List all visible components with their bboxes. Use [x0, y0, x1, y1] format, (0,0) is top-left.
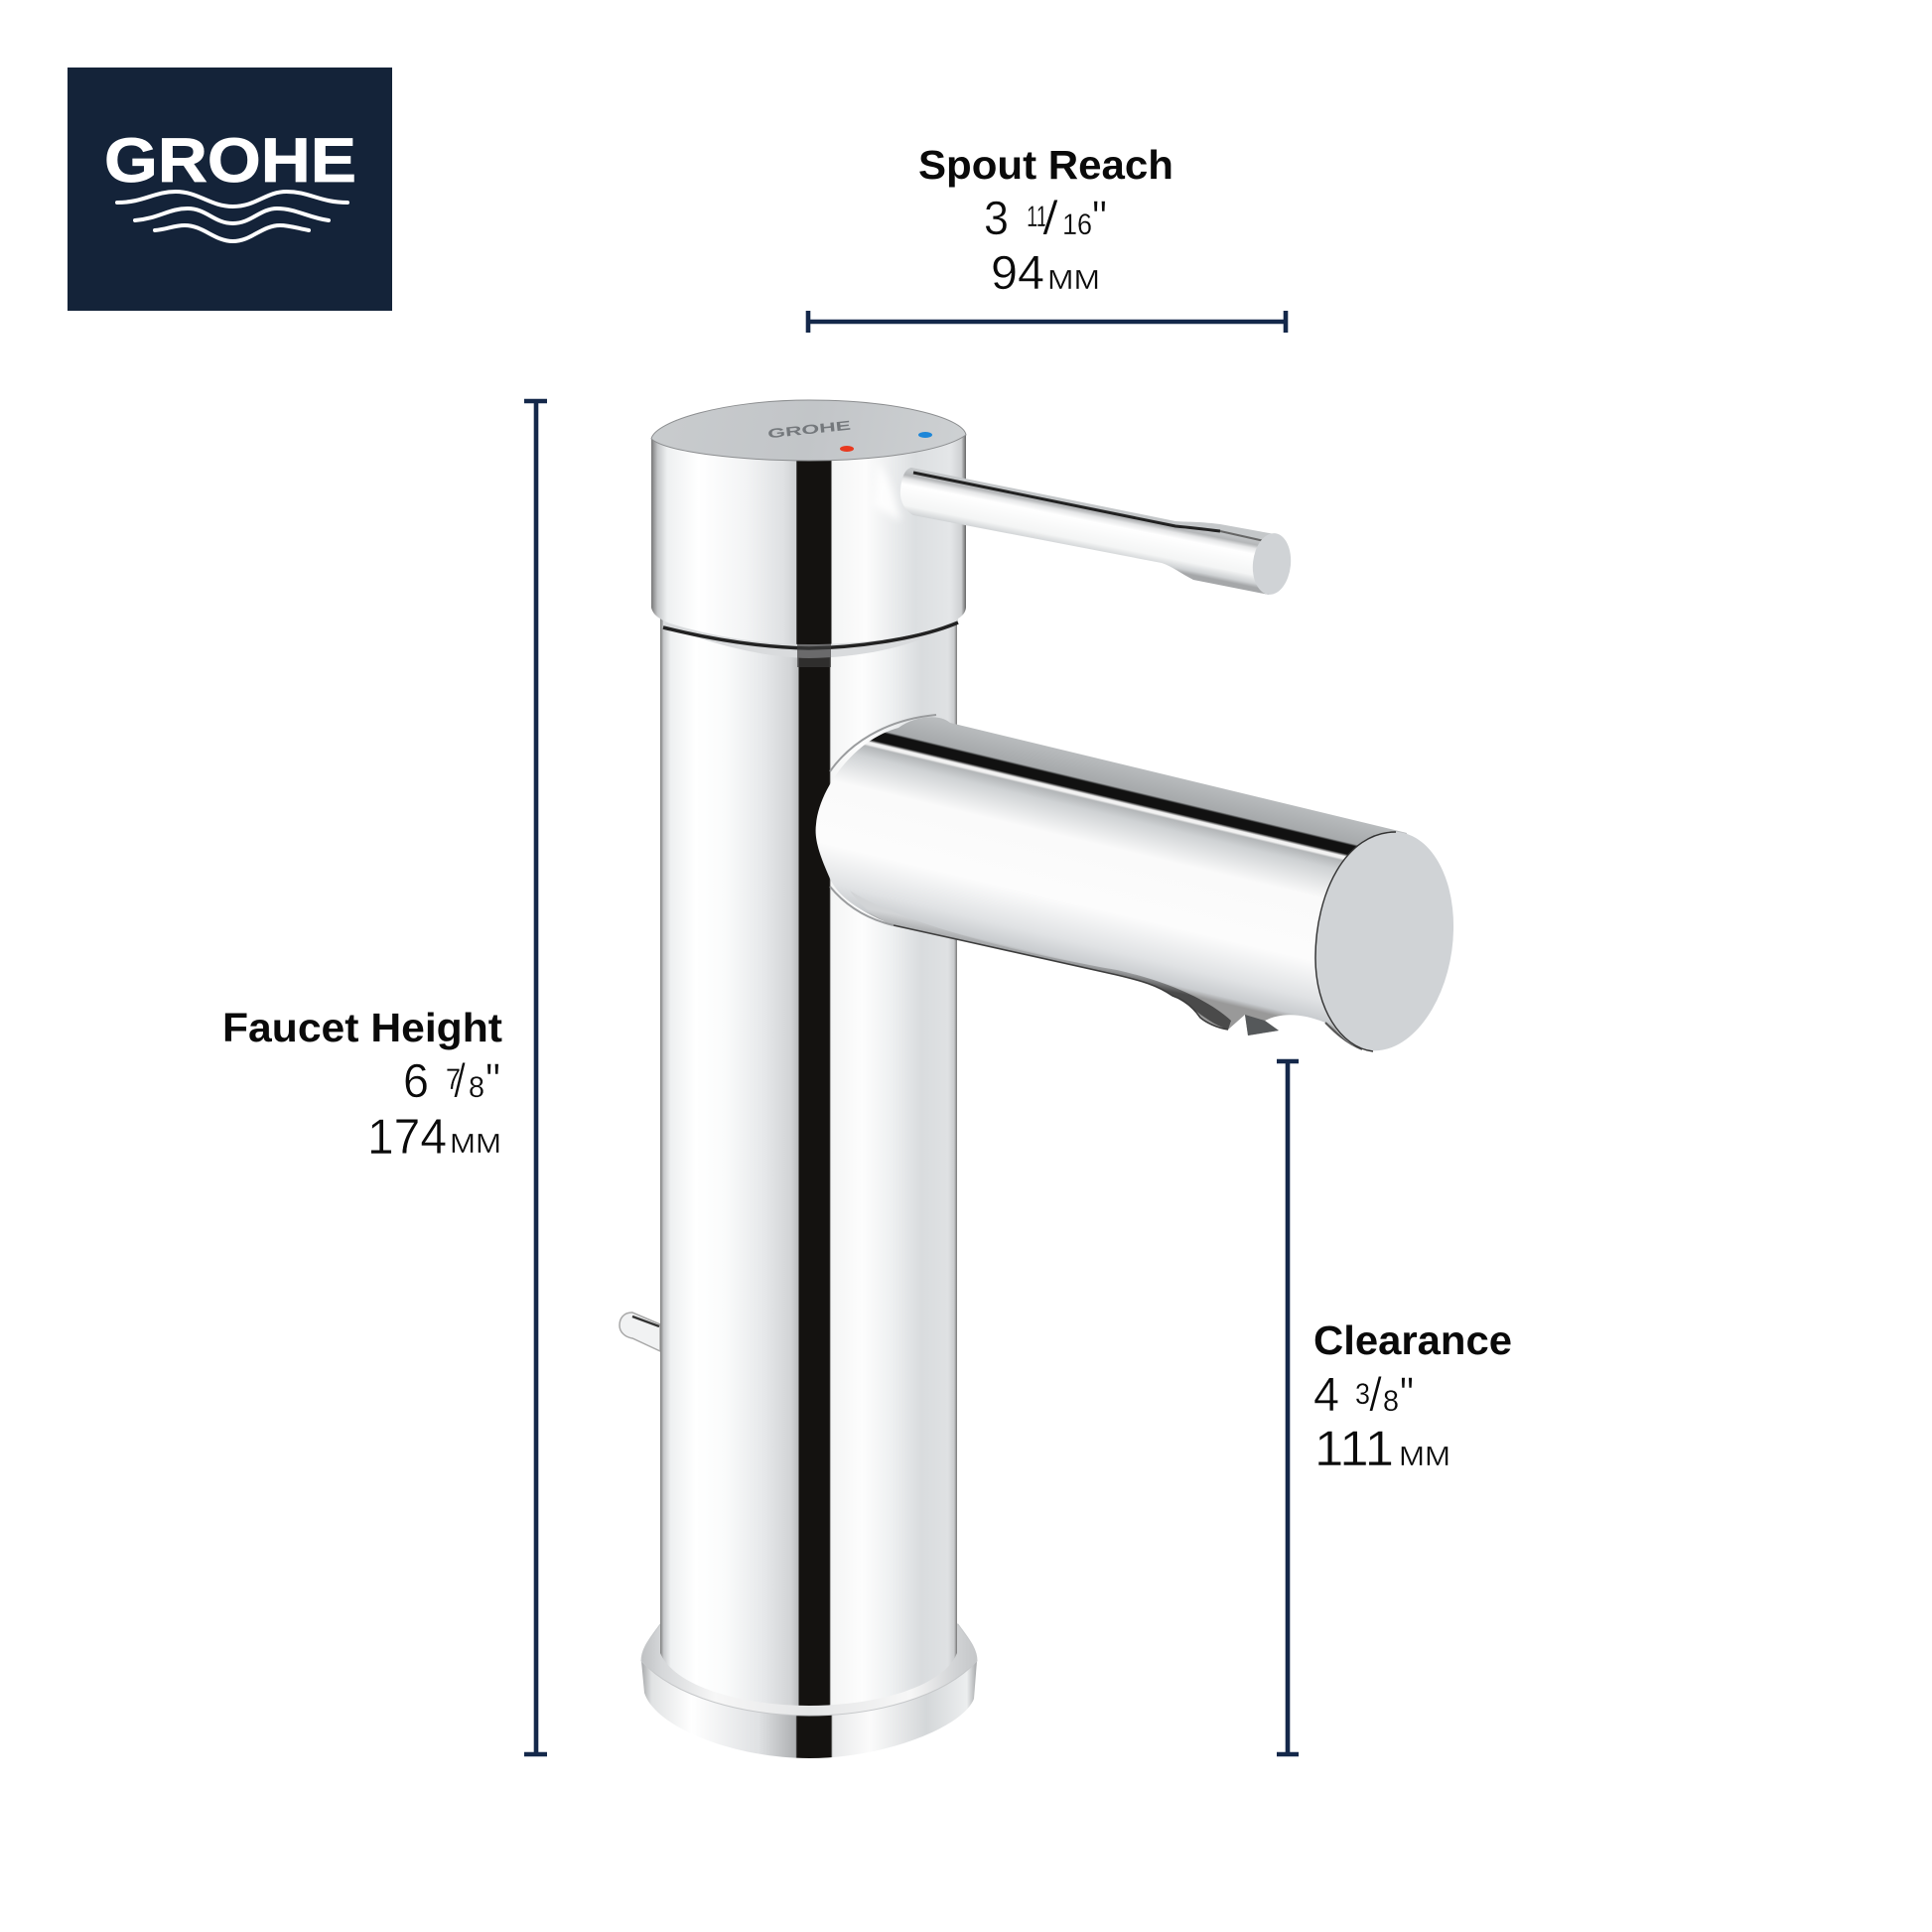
- spout: [816, 715, 1467, 1060]
- label: Faucet Height: 7: [446, 1063, 461, 1096]
- label: Spout Reach: /: [1042, 193, 1059, 245]
- logo: GROHE: [68, 68, 392, 311]
- dimension line: faucet height: [524, 399, 547, 1754]
- label: Spout Reach: 3: [984, 193, 1009, 245]
- label: Faucet Height: /: [454, 1055, 467, 1108]
- label: Clearance: 4: [1313, 1369, 1339, 1422]
- label: Faucet Height: ": [485, 1055, 500, 1108]
- label: Faucet Height: Faucet Height: [222, 1005, 502, 1050]
- lever end disc: [1250, 531, 1294, 597]
- label: Clearance: Clearance: [1313, 1317, 1512, 1363]
- cold dot: [918, 432, 932, 438]
- label: Faucet Height: 174: [367, 1109, 447, 1165]
- handle cylinder: [651, 400, 966, 667]
- handle top face: [651, 400, 966, 461]
- label: Faucet Height: 6: [403, 1055, 429, 1108]
- label: Spout Reach: MM: [1047, 264, 1100, 295]
- logo waves: [117, 192, 347, 241]
- label: Faucet Height: 8: [469, 1071, 484, 1104]
- label: Spout Reach: 16: [1062, 208, 1092, 241]
- label: Clearance: MM: [1399, 1441, 1450, 1471]
- base flange: [641, 1624, 977, 1758]
- label: Spout Reach: ": [1092, 193, 1107, 245]
- label: Spout Reach: Spout Reach: [918, 142, 1173, 188]
- dimension line: spout reach: [808, 311, 1286, 333]
- label: Spout Reach: 11: [1027, 201, 1047, 233]
- label: Clearance: 111: [1314, 1421, 1394, 1476]
- label: Clearance: [1313, 1317, 1512, 1476]
- label: Clearance: 3: [1355, 1378, 1370, 1411]
- faucet body column: [660, 616, 957, 1706]
- label: Faucet Height: [222, 1005, 502, 1165]
- faucet: [620, 400, 1467, 1758]
- hot dot: [840, 446, 854, 452]
- engraved logo: GROHE: [766, 418, 852, 441]
- label: Spout Reach: [918, 142, 1173, 300]
- dimension line: clearance: [1277, 1059, 1299, 1754]
- label: Spout Reach: 94: [991, 247, 1044, 300]
- spout end disc: [1301, 822, 1467, 1060]
- pop-up drain rod: [620, 1312, 660, 1351]
- label: Clearance: /: [1369, 1369, 1383, 1422]
- logo wordmark: GROHE: [104, 126, 356, 196]
- label: Clearance: ": [1400, 1369, 1414, 1422]
- lever: [900, 468, 1294, 597]
- label: Clearance: 8: [1383, 1385, 1399, 1418]
- label: Faucet Height: MM: [450, 1128, 501, 1159]
